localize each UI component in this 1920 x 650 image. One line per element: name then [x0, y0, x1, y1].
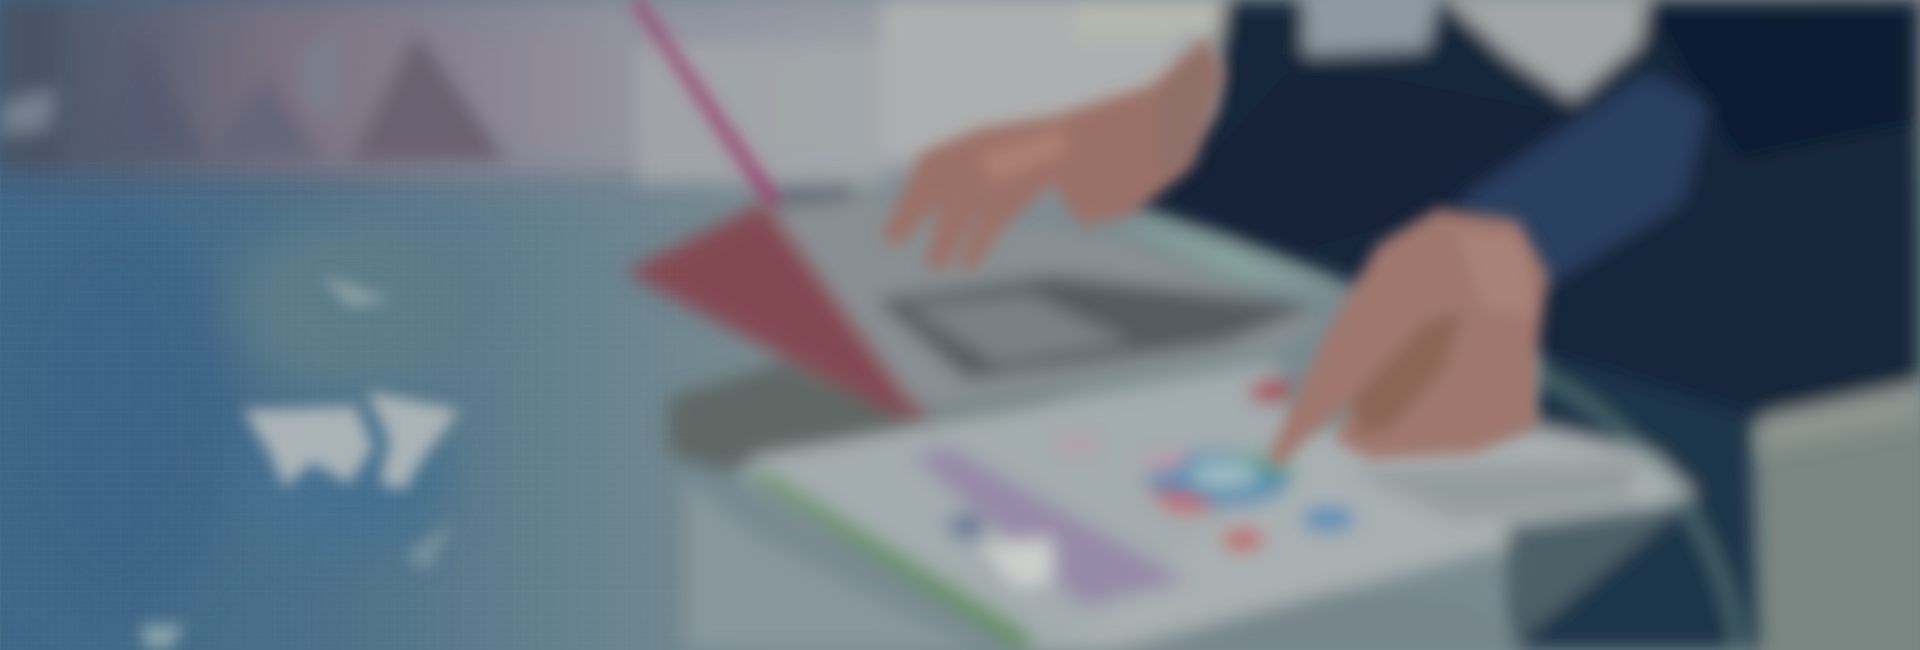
dark suit [1126, 0, 1920, 650]
chart dots [1055, 381, 1371, 550]
purple triangle chart [912, 447, 1188, 606]
upper hand [882, 37, 1224, 272]
dark lower sheet edge [1506, 502, 1690, 643]
top edge wash [0, 0, 1224, 171]
lower hand [1267, 208, 1549, 468]
teal desk edge [1102, 214, 1335, 294]
laptop lid [625, 202, 931, 419]
donut chart [1145, 450, 1298, 512]
shadow under laptop [667, 361, 1078, 471]
map and fine details [141, 0, 1549, 649]
stylus [771, 184, 851, 206]
laptop screen edge [629, 0, 784, 208]
bottom-right wall [1745, 404, 1920, 650]
overall photo grid [0, 159, 686, 650]
glass table rim [1537, 373, 1739, 650]
left skyline shapes [0, 0, 508, 165]
world map highlights [141, 275, 459, 649]
printed chart sheet [747, 361, 1696, 650]
laptop base [765, 196, 1322, 404]
keyboard [876, 275, 1316, 379]
green spine [749, 471, 1035, 650]
bright wall [637, 0, 1224, 184]
glass table front [686, 477, 980, 650]
